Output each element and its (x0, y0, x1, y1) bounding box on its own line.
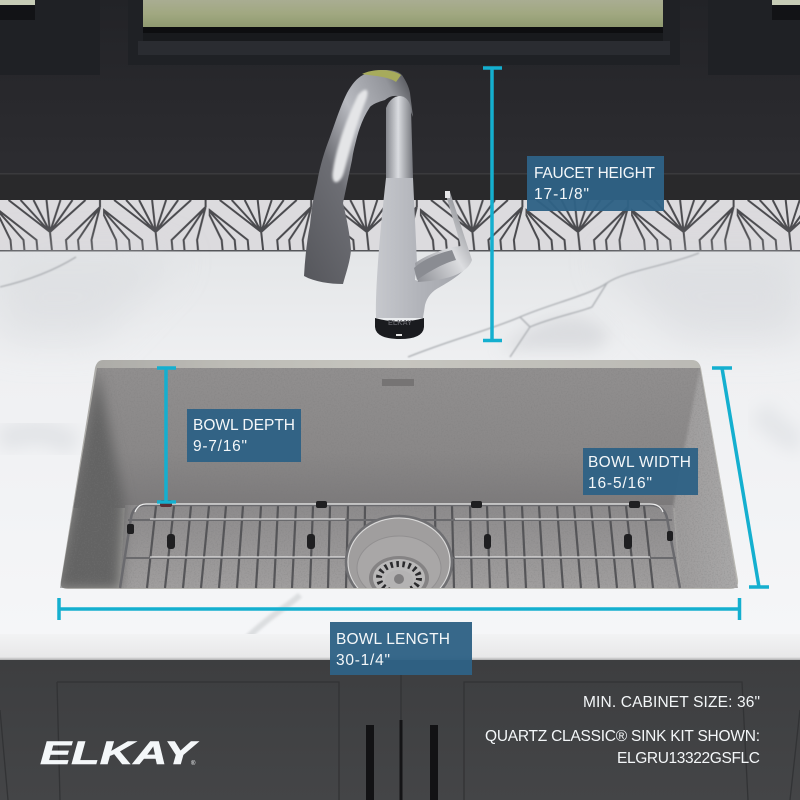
sink brand plate (382, 379, 414, 386)
dimension: bowl depth (157, 368, 301, 502)
backsplash tile (0, 200, 800, 251)
spout highlight (332, 90, 368, 182)
faucet: ELKAY (388, 318, 412, 327)
sink basin (55, 360, 742, 590)
dimension: bowl depth: BOWL DEPTH (193, 417, 295, 434)
dimension: bowl length: 30-1/4" (336, 652, 390, 669)
dimension: bowl length: BOWL LENGTH (336, 631, 450, 648)
dimension: bowl width (583, 368, 769, 587)
background: kitchen window and dark wall (0, 0, 800, 200)
Elkay logo: ELKAY (40, 735, 199, 771)
faucet (304, 70, 472, 339)
marble countertop (0, 250, 800, 640)
dimension: bowl length (59, 598, 740, 675)
faucet spout (304, 70, 413, 284)
cabinet and kit note: QUARTZ CLASSIC® SINK KIT SHOWN: (485, 728, 760, 745)
dimension: bowl width: 16-5/16" (588, 475, 652, 492)
dimension: faucet height (483, 68, 664, 341)
faucet handle (415, 192, 472, 282)
dimension: bowl width: BOWL WIDTH (588, 454, 691, 471)
faucet column (386, 96, 413, 178)
faucet body (376, 178, 470, 318)
cabinet doors (0, 660, 800, 800)
dimension: bowl depth: 9-7/16" (193, 438, 247, 455)
counter front edge (0, 634, 800, 661)
drain strainer (344, 514, 454, 588)
cabinet and kit note: ELGRU13322GSFLC (617, 750, 760, 767)
cabinet and kit note: MIN. CABINET SIZE: 36" (583, 694, 760, 711)
grid clips (127, 500, 673, 549)
dimension: faucet height: FAUCET HEIGHT (534, 165, 656, 182)
wire bottom grid (120, 500, 680, 588)
Elkay logo (40, 735, 199, 771)
faucet base (375, 318, 424, 339)
Elkay logo: ® (191, 760, 196, 767)
dimension: faucet height: 17-1/8" (534, 186, 589, 203)
cabinet and kit note (485, 694, 760, 767)
